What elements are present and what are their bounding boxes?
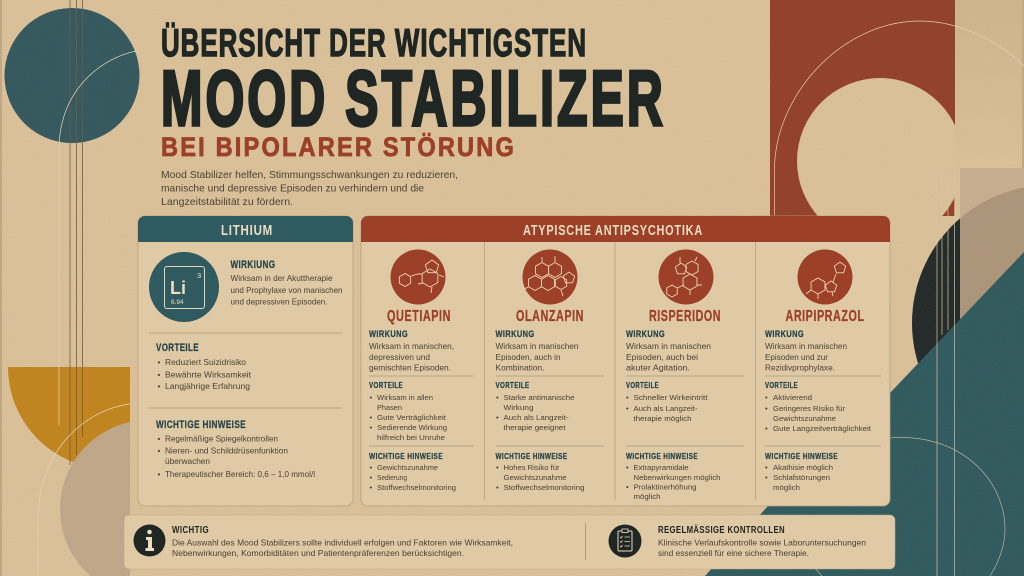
section: Wichtige Hinweise: Sedierung (377, 473, 407, 482)
section: Wichtige Hinweise (496, 451, 584, 492)
section: Vorteile: Geringeres Risiko für (773, 404, 845, 413)
section: Wichtige Hinweise: Akathisie möglich (773, 463, 833, 472)
section: Wirkung (369, 329, 454, 372)
column: Olanzapin (496, 250, 604, 492)
section: Wichtige Hinweise: Gewichtszunahme (377, 463, 438, 472)
icon: lithium element: 3 (197, 271, 201, 280)
note: Wichtig: Die Auswahl des Mood Stabilizers sollte individuell erfolgen und Faktoren wie Wirksamkeit, (172, 538, 513, 548)
section: Wichtige Hinweise: Extrapyramidale (634, 463, 688, 472)
section: Wirkung: WIRKUNG (369, 329, 408, 340)
section: Wichtige Hinweise: WICHTIGE HINWEISE (626, 451, 698, 461)
panel: Atypische Antipsychotika (361, 216, 890, 506)
intro text: manische und depressive Episoden zu verhindern und die (161, 182, 424, 194)
section: Vorteile: VORTEILE (369, 380, 403, 390)
icon: Quetiapin molecule (390, 250, 446, 304)
section: Wichtige Hinweise: möglich (773, 483, 800, 492)
title: MOOD STABILIZER (161, 54, 666, 142)
section: Wirkung: Rezidivprophylaxe. (765, 364, 835, 372)
icon: lithium element: 6.94 (171, 299, 184, 306)
section: Vorteile: VORTEILE (626, 380, 659, 390)
section: Vorteile (496, 380, 574, 432)
section: Vorteile: • (496, 393, 499, 402)
section: Vorteile: VORTEILE (765, 380, 798, 390)
section: Wichtige Hinweise: • (370, 483, 372, 492)
section: Wirkung (230, 259, 343, 306)
column: Risperidon (626, 250, 744, 501)
section: Wirkung: WIRKUNG (626, 329, 665, 340)
section: Wirkung: depressiven und (369, 353, 430, 362)
section: Wichtige Hinweise: • (158, 446, 160, 456)
section: Wichtige Hinweise: • (626, 463, 629, 472)
section: Vorteile: • (626, 393, 629, 402)
section: Wirkung: Kombination. (496, 364, 544, 372)
section: Wirkung: und depressiven Episoden. (230, 298, 328, 306)
section: Vorteile: VORTEILE (156, 342, 199, 354)
icon: Risperidon molecule (658, 250, 714, 304)
panel header: Atypische Antipsychotika: ATYPISCHE ANTIPSYCHOTIKA (523, 223, 703, 239)
section: Wirkung (496, 329, 579, 372)
section: Wirkung: Wirksam in manischen, (369, 342, 454, 351)
intro text: Mood Stabilizer helfen, Stimmungsschwankungen zu reduzieren, (161, 169, 458, 181)
title: BEI BIPOLARER STÖRUNG (161, 132, 516, 162)
section: Wichtige Hinweise (765, 451, 838, 492)
section: Vorteile: • (158, 370, 160, 380)
section: Vorteile: • (496, 413, 499, 422)
section: Vorteile: • (158, 382, 160, 391)
section: Wirkung: Episoden, auch in (496, 353, 561, 362)
section: Wichtige Hinweise: Nieren- und Schilddrüsenfunktion (165, 446, 288, 456)
intro text: Langzeitstabilität zu fördern. (161, 196, 293, 208)
note: Wichtig (172, 524, 513, 558)
section: Wichtige Hinweise (626, 451, 720, 501)
panel header: Lithium: LITHIUM (221, 222, 273, 239)
section: Vorteile: Wirksam in allen (377, 393, 433, 402)
intro text (161, 169, 458, 208)
icon: Aripiprazol molecule (798, 250, 852, 304)
section: Wirkung: Episoden und zur (765, 353, 828, 362)
section: Vorteile: • (158, 358, 160, 367)
section: Vorteile: • (626, 404, 629, 413)
icon: Olanzapin molecule (522, 250, 578, 304)
note: Regelmäßige Kontrollen: Klinische Verlaufskontrolle sowie Laboruntersuchungen (658, 538, 866, 548)
section: Wirkung: WIRKUNG (765, 329, 804, 340)
section: Wirkung: akuter Agitation. (626, 364, 690, 372)
section: Wichtige Hinweise: Therapeutischer Bereich: 0,6 – 1,0 mmol/l (165, 470, 315, 479)
drug name: ARIPIPRAZOL (786, 308, 864, 325)
column: Quetiapin (369, 250, 474, 492)
section: Wichtige Hinweise: • (158, 434, 160, 444)
section: Wirkung: gemischten Episoden. (369, 364, 451, 372)
section: Wichtige Hinweise: • (370, 463, 372, 472)
section: Wichtige Hinweise: überwachen (165, 457, 210, 466)
section: Wichtige Hinweise: WICHTIGE HINWEISE (156, 419, 246, 431)
section: Vorteile: VORTEILE (496, 380, 530, 390)
icon: info (134, 524, 166, 556)
section: Wichtige Hinweise: • (765, 473, 768, 482)
icon: lithium element: Li (170, 278, 186, 298)
section: Vorteile: • (370, 393, 372, 402)
section: Vorteile (369, 380, 447, 442)
section: Wichtige Hinweise: WICHTIGE HINWEISE (369, 451, 443, 461)
section: Wirkung: und Prophylaxe von manischen (230, 286, 343, 295)
section: Vorteile: Gute Verträglichkeit (377, 413, 447, 422)
section: Wirkung: Wirksam in manischen (496, 342, 579, 351)
section: Wichtige Hinweise: Gewichtszunahme (504, 473, 566, 482)
section: Vorteile: therapie geeignet (504, 423, 566, 432)
section: Wichtige Hinweise: WICHTIGE HINWEISE (765, 451, 838, 461)
section: Wichtige Hinweise: • (370, 473, 372, 482)
column: Aripiprazol (765, 250, 881, 492)
section: Wirkung (765, 329, 847, 372)
panel: Lithium (138, 216, 353, 506)
section: Wichtige Hinweise: Nebenwirkungen möglich (634, 473, 720, 482)
note: Regelmäßige Kontrollen: REGELMÄSSIGE KONTROLLEN (658, 523, 785, 536)
note: Regelmäßige Kontrollen: sind essenziell für eine sichere Therapie. (658, 548, 809, 558)
section: Wichtige Hinweise: Schlafstörungen (773, 473, 830, 482)
section: Vorteile: • (765, 393, 768, 402)
drug name: RISPERIDON (649, 308, 721, 325)
section: Vorteile: therapie möglich (634, 414, 692, 423)
section: Vorteile: Sedierende Wirkung (377, 423, 447, 432)
note: Wichtig: Nebenwirkungen, Komorbiditäten und Patientenpräferenzen berücksichtigen. (172, 548, 464, 558)
section: Wirkung (626, 329, 711, 372)
section: Wirkung: WIRKIUNG (230, 259, 276, 271)
section: Vorteile: • (765, 424, 768, 433)
section: Wirkung: Wirksam in manischen (626, 342, 711, 351)
section: Vorteile (765, 380, 872, 433)
decorative shapes: right (705, 0, 1024, 576)
panel header: Atypische Antipsychotika (361, 216, 890, 242)
section: Wichtige Hinweise: WICHTIGE HINWEISE (496, 451, 568, 461)
section: Wichtige Hinweise: • (626, 482, 629, 492)
section: Vorteile: • (765, 404, 768, 413)
section: Wirkung: WIRKUNG (496, 329, 534, 340)
drug name: QUETIAPIN (387, 308, 451, 325)
section: Wichtige Hinweise: • (158, 470, 160, 479)
section: Wichtige Hinweise (369, 451, 456, 492)
section: Vorteile: Gewichtszunahme (773, 414, 836, 423)
section: Vorteile: Bewährte Wirksamkeit (165, 370, 252, 380)
section: Wichtige Hinweise: Regelmäßige Spiegelkontrollen (165, 434, 278, 444)
section: Vorteile: Gute Langzeitverträglichkeit (773, 424, 872, 433)
section: Wichtige Hinweise: möglich (634, 492, 660, 501)
section: Wirkung: Episoden, auch bei (626, 353, 698, 362)
icon: lithium element (149, 252, 219, 322)
section: Vorteile: Wirkung (504, 403, 534, 412)
section: Wichtige Hinweise: Prolaktinerhöhung (634, 482, 696, 492)
section: Vorteile: Schneller Wirkeintritt (634, 393, 708, 402)
section: Vorteile (626, 380, 708, 423)
section: Vorteile: • (370, 423, 372, 432)
section: Vorteile: Phasen (377, 403, 402, 412)
section: Vorteile: Aktivierend (773, 393, 812, 402)
note: Wichtig: WICHTIG (172, 524, 209, 536)
drug name: OLANZAPIN (516, 308, 584, 325)
section: Vorteile: Auch als Langzeit- (634, 404, 698, 413)
section: Vorteile: Auch als Langzeit- (504, 413, 569, 422)
section: Wirkung: Wirksam in manischen (765, 342, 847, 351)
section: Wichtige Hinweise: Hohes Risiko für (504, 463, 560, 472)
section: Vorteile: • (370, 413, 372, 422)
icon: clipboard checklist (608, 524, 642, 558)
panel background: bottom notes (124, 515, 895, 569)
section: Wichtige Hinweise: Stoffwechselmonitoring (504, 483, 584, 492)
panel header: Lithium (138, 216, 353, 242)
panel: bottom notes (124, 515, 895, 569)
panel background: Lithium (138, 216, 353, 506)
section: Wichtige Hinweise (156, 419, 315, 479)
note: Regelmäßige Kontrollen (658, 523, 866, 558)
section: Vorteile: Langjährige Erfahrung (165, 382, 250, 391)
panel background: Atypische Antipsychotika (361, 216, 890, 506)
title: ÜBERSICHT DER WICHTIGSTEN (161, 22, 587, 65)
section: Wichtige Hinweise: • (765, 463, 768, 472)
section: Wichtige Hinweise: • (496, 463, 499, 472)
section: Vorteile: Starke antimanische (504, 393, 574, 402)
section: Wichtige Hinweise: • (496, 483, 499, 492)
section: Wirkung: Wirksam in der Akuttherapie (230, 274, 333, 283)
section: Vorteile: hilfreich bei Unruhe (377, 433, 445, 442)
section: Vorteile (156, 342, 252, 391)
section: Wichtige Hinweise: Stoffwechselmonitoring (377, 483, 456, 492)
section: Vorteile: Reduziert Suizidrisiko (165, 358, 246, 367)
title (161, 22, 666, 162)
